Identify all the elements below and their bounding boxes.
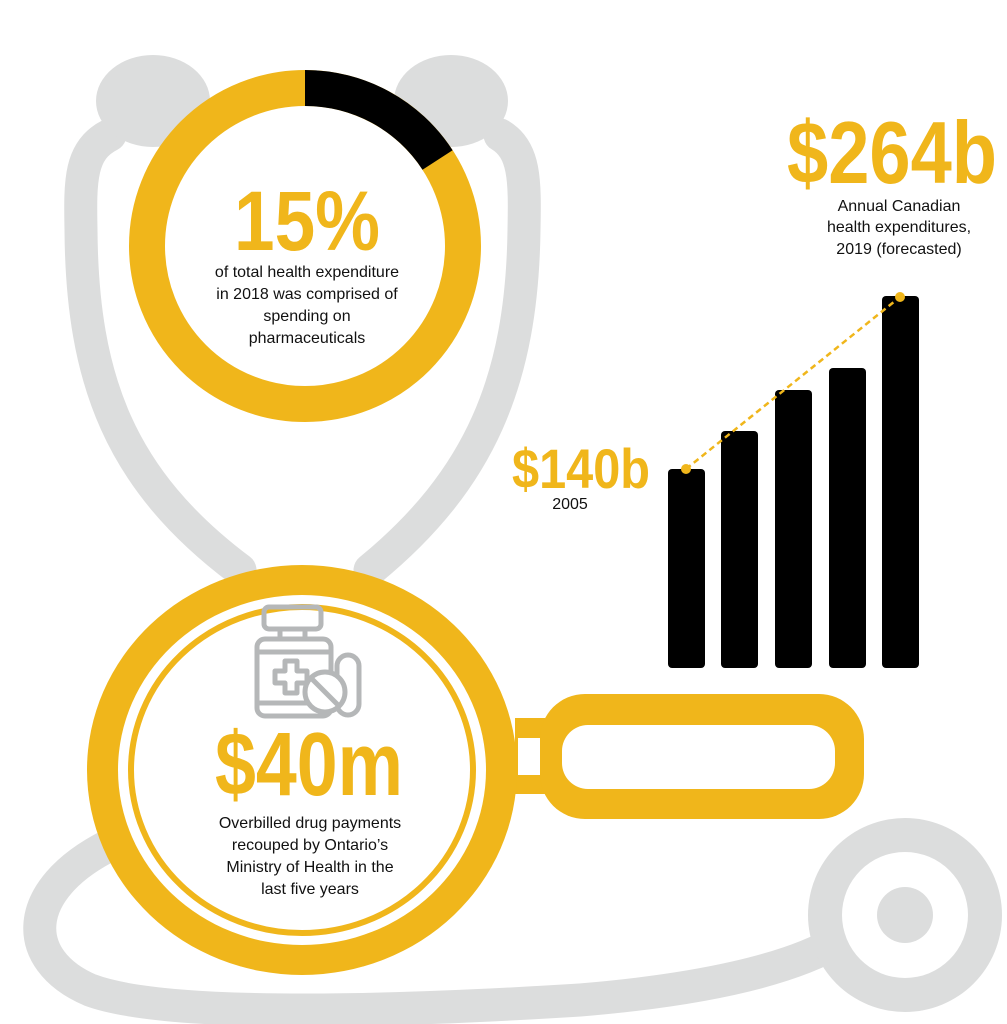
$40m text block: last five years	[261, 881, 359, 898]
$264b label: Annual Canadian	[838, 198, 960, 215]
$40m text block: $40m	[215, 715, 403, 815]
$140b label: 2005	[552, 496, 588, 513]
$40m text block: Ministry of Health in the	[226, 859, 394, 876]
15% text block: in 2018 was comprised of	[216, 286, 398, 303]
15% text block: 15%	[234, 174, 380, 268]
$264b label	[787, 103, 997, 258]
15% text block: spending on	[263, 308, 351, 325]
15% text block	[215, 174, 399, 347]
stethoscope tubes	[40, 135, 840, 1010]
magnifier	[87, 565, 864, 975]
15% text block: pharmaceuticals	[249, 330, 365, 347]
chestpiece	[808, 818, 1002, 1012]
$40m text block	[215, 715, 403, 898]
$140b label: $140b	[512, 437, 650, 500]
$264b label: health expenditures,	[827, 219, 971, 236]
15% text block: of total health expenditure	[215, 264, 399, 281]
$264b label: 2019 (forecasted)	[836, 241, 962, 258]
$40m text block: recouped by Ontario’s	[232, 837, 388, 854]
icon: medicine bottle and pills	[257, 607, 359, 716]
trend line	[681, 292, 905, 474]
$40m text block: Overbilled drug payments	[219, 815, 401, 832]
donut chart: 15%	[147, 70, 463, 404]
earpieces	[96, 55, 508, 147]
bar chart	[668, 296, 919, 668]
